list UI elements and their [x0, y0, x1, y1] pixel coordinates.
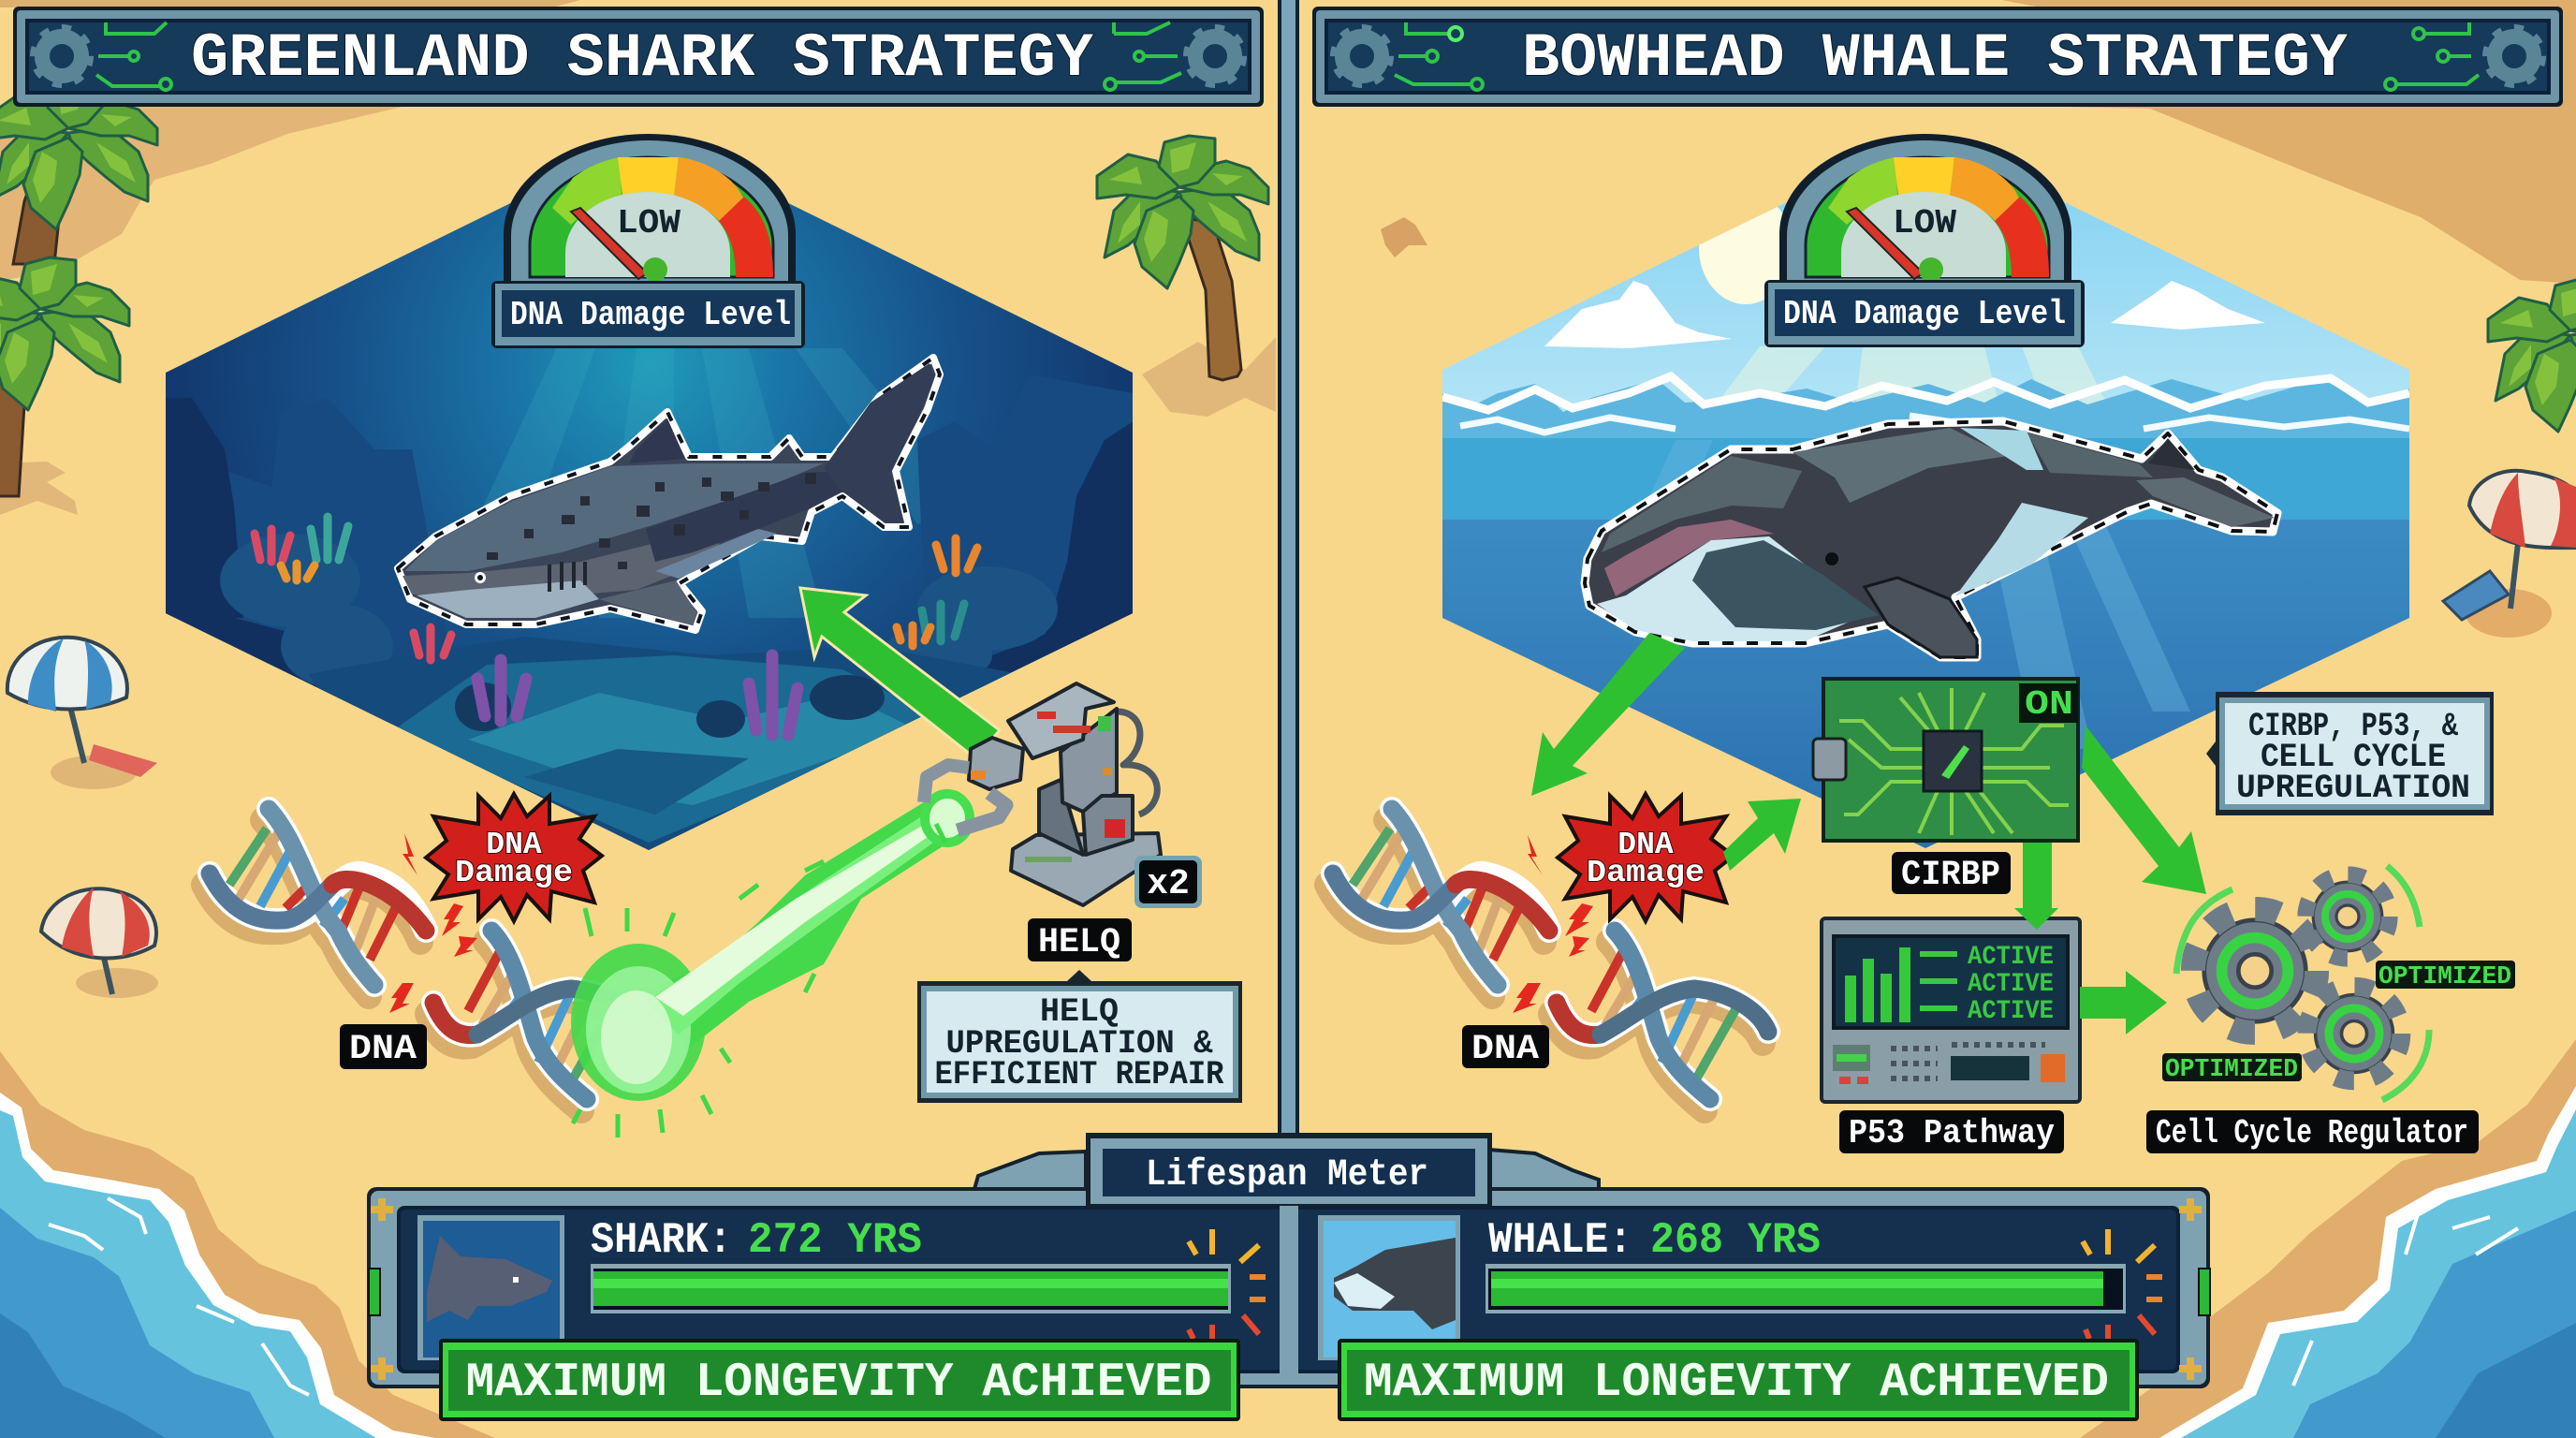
arrow: HELQ to shark	[800, 588, 1000, 758]
waves	[1442, 379, 2409, 438]
header icon: gear left	[34, 28, 90, 84]
gauge label: DNA Damage Level	[1783, 295, 2066, 333]
header icon: gear right	[1187, 28, 1243, 84]
label: DNA whale side: DNA	[1471, 1030, 1540, 1069]
callout: CIRBP P53 upregulation: UPREGULATION	[2236, 770, 2470, 807]
meter side fins	[974, 1152, 1086, 1189]
chip processor	[1924, 731, 1982, 791]
robot joint	[969, 738, 1023, 789]
sky light rays	[1722, 346, 2104, 404]
repair bulb outer	[571, 944, 706, 1101]
whale lifespan value: WHALE:	[1488, 1216, 1632, 1265]
meter frame	[367, 1187, 2210, 1388]
repair beam middle	[646, 807, 957, 1034]
banner: shark maximum longevity	[439, 1339, 1240, 1421]
banner: shark maximum longevity: MAXIMUM LONGEVITY ACHIEVED	[466, 1357, 1211, 1410]
sea rays	[1619, 440, 2190, 749]
upper sea band	[1442, 438, 2409, 520]
meter inner panel	[397, 1206, 2180, 1373]
whale lifespan bar	[1486, 1264, 2126, 1313]
water: bottom left shore	[0, 1093, 435, 1438]
robot indicator lights	[971, 712, 1125, 862]
whale	[1585, 421, 2277, 657]
header icon: gear right	[2486, 28, 2542, 84]
arrow: damage to CIRBP	[1723, 799, 1801, 871]
shark	[398, 358, 940, 630]
chip core glyph	[1941, 745, 1969, 779]
robot lower claw	[958, 793, 1006, 830]
chip ON indicator: ON	[2025, 685, 2073, 724]
header title: BOWHEAD WHALE STRATEGY	[1522, 23, 2348, 94]
sun	[1699, 207, 1782, 304]
whale eye	[1825, 552, 1838, 565]
header title: GREENLAND SHARK STRATEGY	[191, 23, 1093, 94]
meter corner studs	[371, 1198, 2202, 1380]
damage burst: whale side: Damage	[1587, 856, 1705, 890]
meter title tab: Lifespan Meter	[1146, 1154, 1428, 1196]
meter side connectors	[369, 1206, 2210, 1374]
gauge frame	[504, 134, 796, 290]
repair bulb middle	[586, 966, 691, 1093]
gauge: whale DNA damage level	[1764, 134, 2085, 347]
label: optimized upper: OPTIMIZED	[2378, 963, 2511, 991]
gauge colour bands	[1828, 157, 1897, 225]
label: P53 pathway: P53 Pathway	[1849, 1114, 2055, 1152]
palm tree: top centre-left	[1097, 136, 1268, 380]
water: bottom right shore	[2159, 1086, 2576, 1438]
repair beam outer	[637, 800, 966, 1049]
repair sparks	[573, 824, 945, 1137]
shark back shading	[404, 463, 824, 571]
robot base	[1011, 833, 1161, 905]
chip: CIRBP	[1813, 677, 2080, 843]
damage burst: whale side: DNA	[1617, 828, 1674, 862]
shark bar sparks	[1189, 1229, 1266, 1339]
monitor readouts: ACTIVE	[1968, 943, 2054, 972]
header circuit traces	[1395, 22, 2479, 90]
whale bar sparks	[2083, 1229, 2162, 1339]
DNA repair beam	[571, 794, 970, 1137]
shark belly	[417, 580, 599, 618]
meter title tab	[1086, 1133, 1492, 1206]
monitor readouts: ACTIVE	[1968, 997, 2054, 1026]
gauge reading: LOW	[1893, 204, 1956, 242]
header: Bowhead whale strategy	[1312, 7, 2563, 107]
gauge frame	[1779, 134, 2071, 290]
shark eye and gills	[475, 562, 585, 592]
beach umbrella: blue	[7, 638, 157, 789]
label: optimized lower: OPTIMIZED	[2165, 1056, 2298, 1084]
gauge needle	[1847, 208, 1924, 279]
gauge face	[565, 192, 730, 277]
scene: open sea hexagon (whale)	[1442, 202, 2409, 848]
gauge needle	[571, 208, 648, 279]
shark lifespan value: SHARK:	[591, 1216, 732, 1265]
chip traces	[1839, 688, 2069, 835]
scene: deep ocean hexagon (shark)	[166, 135, 1134, 850]
shark spots	[487, 473, 816, 569]
robot upper claw	[924, 765, 969, 802]
shark lifespan value	[591, 1216, 922, 1265]
light rays	[483, 348, 921, 618]
chip connector	[1813, 739, 1846, 780]
whale mouth	[1604, 520, 1774, 596]
whale portrait	[1318, 1215, 1460, 1360]
label: CIRBP: CIRBP	[1901, 856, 2000, 895]
clouds	[1544, 281, 2265, 348]
DNA strand: whale side	[1327, 809, 1768, 1110]
repair glow: emitter	[925, 794, 970, 843]
shark dark rear	[646, 468, 889, 562]
arrow: CIRBP to P53	[2014, 843, 2058, 930]
label: HELQ: HELQ	[1038, 923, 1120, 962]
gauge hub	[1919, 257, 1943, 282]
repair bulb core	[601, 990, 672, 1084]
palm tree: top left	[0, 77, 157, 264]
label: DNA whale side	[1462, 1025, 1549, 1069]
DNA strand: shark side	[204, 809, 645, 1110]
lifespan meter panel	[367, 1133, 2210, 1388]
callout: CIRBP P53 upregulation: CIRBP, P53, &	[2248, 708, 2458, 745]
banner: whale maximum longevity	[1338, 1339, 2139, 1421]
gauge face	[1841, 192, 2006, 277]
callout: CIRBP P53 upregulation	[2206, 692, 2494, 815]
rotation arrows	[2176, 866, 2429, 1100]
badge: x2	[1134, 856, 1202, 908]
banner: whale maximum longevity: MAXIMUM LONGEVITY ACHIEVED	[1364, 1357, 2109, 1410]
sea floor	[309, 637, 1020, 850]
corals	[255, 517, 977, 660]
gauge reading: LOW	[617, 204, 681, 242]
beach umbrella: red	[41, 888, 158, 998]
robot arm segment	[1008, 683, 1114, 758]
damage burst: shark side	[426, 794, 602, 921]
damage burst: whale side	[1558, 794, 1734, 921]
divider between strategies	[1278, 0, 1299, 1142]
whale jaw	[1597, 536, 1858, 641]
monitor readouts: ACTIVE	[1968, 970, 2054, 999]
gear: lower	[2307, 987, 2401, 1080]
shark lifespan bar	[591, 1264, 1231, 1313]
floor rocks	[455, 675, 885, 738]
beach umbrella: right	[2443, 471, 2576, 638]
arrow: CIRBP to gears	[2082, 726, 2206, 894]
header icon: gear left	[1334, 28, 1390, 84]
gauge hub	[643, 257, 667, 282]
whale lifespan value	[1488, 1216, 1821, 1265]
gauge label	[1764, 280, 2085, 347]
gauge label	[491, 281, 805, 348]
callout: HELQ upregulation: UPREGULATION &	[945, 1025, 1213, 1063]
shark fins	[629, 418, 685, 463]
shark portrait	[417, 1215, 564, 1360]
gauge colour bands	[552, 157, 622, 225]
gauge label: DNA Damage Level	[510, 296, 791, 334]
gear: upper	[2305, 874, 2390, 959]
repair beam core	[655, 814, 949, 1016]
monitor console	[1833, 1045, 2065, 1084]
callout: HELQ upregulation	[917, 970, 1242, 1103]
damage burst: shark side: DNA	[486, 828, 542, 862]
reef rocks	[220, 534, 1058, 688]
whale markings	[1602, 428, 2275, 596]
label: cell cycle regulator: Cell Cycle Regulator	[2156, 1114, 2468, 1152]
palm tree: mid left	[0, 257, 129, 496]
shark lifespan value: 272 YRS	[748, 1216, 922, 1265]
background rock silhouettes	[166, 374, 1134, 674]
whale lifespan value: 268 YRS	[1650, 1216, 1821, 1265]
header circuit traces	[96, 22, 1181, 90]
robot cables	[1117, 712, 1157, 814]
callout: HELQ upregulation: HELQ	[1040, 993, 1119, 1031]
whale flipper	[1865, 578, 1977, 657]
gauge: shark DNA damage level	[491, 134, 805, 348]
label: DNA shark side: DNA	[349, 1030, 417, 1069]
gear: large	[2193, 909, 2317, 1033]
robot arm: HELQ	[924, 683, 1161, 905]
monitor screen	[1834, 936, 2068, 1028]
monitor: P53 pathway	[1822, 918, 2080, 1102]
arrow: whale to DNA	[1531, 633, 1685, 796]
robot rear column	[1039, 780, 1083, 855]
lower sea	[1442, 520, 2410, 857]
gears: cell cycle regulator	[2176, 866, 2429, 1100]
palm tree: right edge	[2488, 279, 2576, 432]
damage bolts: shark side	[389, 833, 477, 1013]
monitor bars	[1845, 947, 1910, 1022]
monitor readouts	[1920, 943, 2054, 1026]
damage burst: shark side: Damage	[455, 856, 573, 890]
robot column	[1061, 709, 1117, 812]
label: DNA shark side	[340, 1024, 427, 1069]
header: Greenland shark strategy	[13, 7, 1264, 107]
damage bolts: whale side	[1513, 835, 1593, 1013]
robot shield	[1083, 796, 1133, 855]
badge: x2: x2	[1147, 864, 1190, 904]
chip ON indicator	[2019, 683, 2078, 724]
arrow: P53 to gears	[2080, 971, 2167, 1034]
callout: HELQ upregulation: EFFICIENT REPAIR	[934, 1056, 1224, 1093]
callout: CIRBP P53 upregulation: CELL CYCLE	[2261, 739, 2446, 776]
dark side columns	[166, 398, 1134, 850]
